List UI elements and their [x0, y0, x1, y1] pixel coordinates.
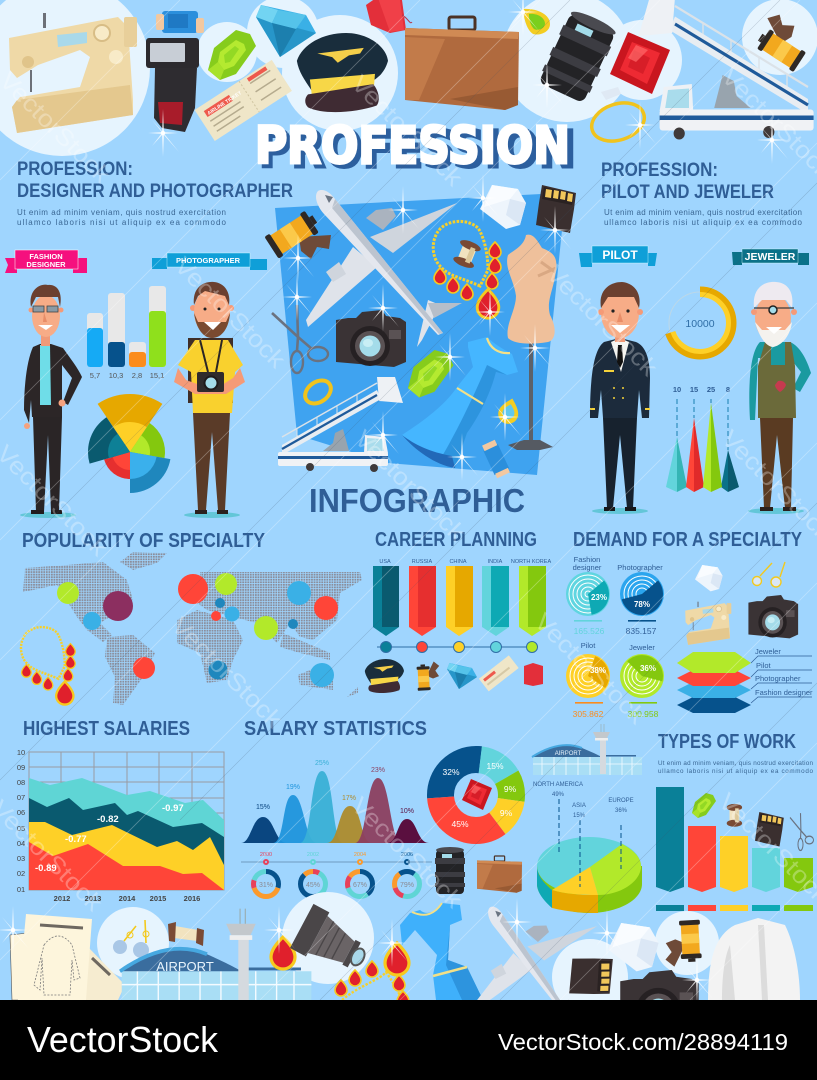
watermark: [0, 63, 817, 918]
icon: ruby pendant bottom: [271, 937, 295, 969]
demand gauge: fashion designer: Fashion: [574, 555, 600, 564]
footer bar: VectorStock.com/28894119: [498, 1029, 788, 1055]
ribbon: photographer: [152, 253, 267, 270]
donut chart with ruby: 9%: [500, 808, 513, 818]
title: PROFESSION: [259, 121, 576, 180]
donut chart with ruby: 45%: [451, 819, 469, 829]
career ribbons chart: CHINA: [449, 559, 467, 565]
icon: camera bottom: [620, 970, 699, 1034]
icon: suitcase small: [477, 856, 522, 893]
character: pilot: [590, 282, 650, 514]
timeline donuts: 2002: [307, 852, 319, 858]
icon: ruby necklace: [433, 221, 501, 318]
career icons row: [365, 655, 543, 696]
stacked area chart: 2012: [54, 894, 70, 903]
character: photographer: [174, 282, 245, 518]
watermark: VectorStock: [166, 612, 288, 735]
icon: blue thread spool: [156, 11, 204, 33]
ribbon: fashion designer: DESIGNER: [26, 260, 66, 269]
3D pie chart: 36%: [615, 808, 628, 814]
text block: types of work: Ut enim ad minim veniam, quis nostrud exercitation: [658, 760, 813, 767]
layered hexagon legend: [677, 647, 813, 713]
pyramid chart: 15: [690, 385, 698, 394]
heading: pilot and jeweler: [601, 160, 774, 203]
ribbon bar chart: types of work: [656, 787, 813, 911]
stacked area chart: -0.82: [97, 814, 119, 825]
demand gauge: pilot: 305.862: [573, 709, 604, 719]
airport small: [532, 724, 642, 775]
bell curves chart: 23%: [371, 767, 385, 774]
icon: scissors center: [272, 305, 328, 373]
text block: designer intro: [17, 208, 227, 227]
icon: camera flash: [146, 38, 199, 132]
3D pie chart: [533, 782, 642, 913]
icon: white shirt: [708, 918, 800, 1000]
career ribbons chart: INDIA: [488, 559, 503, 565]
demand gauge: photographer: 835.157: [626, 626, 657, 636]
icon: thread spool bottom: [168, 922, 204, 946]
stacked area chart: -0.89: [35, 863, 57, 874]
icon: film roll: [746, 9, 811, 82]
stacked area chart: 04: [17, 839, 25, 848]
stacked area chart: 2016: [184, 894, 200, 903]
heading: highest salaries: HIGHEST SALARIES: [23, 718, 190, 740]
stacked area chart: 01: [17, 885, 25, 894]
bell curves chart: 19%: [286, 784, 300, 791]
text block: types of work: [658, 760, 813, 775]
donut gauge: 10000: 10000: [685, 318, 715, 330]
icon: airplane stairs center: [278, 377, 403, 472]
timeline donuts: 2006: [401, 852, 413, 858]
character: fashion designer: [20, 285, 82, 518]
bar chart: four values: 2,8: [132, 371, 142, 380]
bell curves chart: 17%: [342, 795, 356, 802]
ribbon: jeweler: JEWELER: [745, 251, 796, 263]
ribbon: pilot: PILOT: [602, 248, 638, 262]
icon: thread spool center: [452, 238, 482, 270]
icon: sewing machine: [9, 13, 137, 133]
heading: designer and photographer: [17, 159, 293, 202]
icon: gold ring center: [301, 376, 335, 408]
career ribbons chart: [373, 559, 551, 652]
airport large: AIRPORT: [156, 959, 214, 974]
icon: green gem center: [408, 350, 454, 398]
icon: necklace bottom: [335, 943, 409, 1007]
donut gauge: 10000: [666, 290, 734, 356]
polar pie chart: [88, 394, 170, 493]
demand gauge: pilot: Pilot: [581, 641, 596, 650]
icon: gold ring: [587, 87, 649, 147]
watermark: VectorStock: [529, 608, 651, 731]
icon: film roll center: [264, 209, 331, 259]
title: PROFESSION: [255, 117, 570, 176]
pyramid chart: 10: [673, 385, 681, 394]
demand gauge: jeweler: 300.958: [628, 709, 659, 719]
ribbon: jeweler: [732, 249, 809, 265]
timeline donuts: 2000: [260, 852, 272, 858]
character: jeweler: [748, 282, 811, 514]
icon: dress bottom: [400, 903, 483, 1000]
stacked area chart: 08: [17, 778, 25, 787]
heading: designer and photographer: DESIGNER AND PHOTOGRAPHER: [17, 181, 293, 202]
icon: gold earrings: [113, 920, 149, 958]
heading: career planning: CAREER PLANNING: [375, 529, 537, 551]
world map with bubbles: [23, 552, 362, 705]
layered hexagon legend: Photographer: [755, 674, 801, 683]
3D pie chart: NORTH AMERICA: [533, 782, 583, 788]
layered hexagon legend: Jeweler: [755, 647, 781, 656]
demand gauge: photographer: Photographer: [617, 563, 663, 572]
demand gauge: photographer: [617, 563, 664, 636]
career ribbons chart: NORTH KOREA: [511, 559, 551, 565]
icon: green gem: [208, 30, 256, 80]
stacked area chart: 2013: [85, 894, 101, 903]
bar chart: four values: 10,3: [109, 371, 123, 380]
icon: suitcase: [405, 17, 519, 110]
text block: pilot intro: Ut enim ad minim veniam, quis nostrud exercitation: [604, 208, 802, 217]
demand gauge: photographer: 78%: [634, 600, 650, 609]
watermark: VectorStock: [346, 792, 468, 915]
donut chart with ruby: 15%: [486, 761, 504, 771]
stacked area chart: 09: [17, 763, 25, 772]
timeline donuts: 31%: [259, 882, 273, 889]
timeline donuts: 2004: [354, 852, 366, 858]
bar chart: four values: 5,7: [90, 371, 100, 380]
demand icons: [685, 562, 798, 645]
stacked area chart: 2015: [150, 894, 166, 903]
text block: pilot intro: [604, 208, 803, 227]
watermark: VectorStock: [349, 425, 471, 548]
pyramid chart: 8: [726, 385, 730, 394]
ribbon: photographer: PHOTOGRAPHER: [176, 256, 241, 265]
demand gauge: pilot: 38%: [590, 666, 606, 675]
bell curves chart: 15%: [256, 804, 270, 811]
watermark: VectorStock: [541, 260, 663, 383]
text block: types of work: ullamco laboris nisi ut aliquip ex ea commodo: [658, 768, 813, 775]
text block: designer intro: ullamco laboris nisi ut aliquip ex ea commodo: [17, 218, 227, 227]
heading: pilot and jeweler: PROFESSION:: [601, 160, 718, 181]
demand gauge: jeweler: 36%: [640, 664, 656, 673]
stacked area chart: -0.77: [65, 834, 87, 845]
icon: sewing patterns: [10, 914, 125, 1000]
bell curves chart: [241, 760, 429, 843]
bell curves chart: 25%: [315, 760, 329, 767]
demand gauge: jeweler: [620, 643, 664, 719]
icon: pilot cap: [297, 33, 388, 112]
icon: camera center: [336, 310, 406, 367]
icon: lens small: [435, 847, 465, 894]
icon: airplane stairs truck: [639, 0, 814, 140]
timeline donuts: 67%: [353, 882, 367, 889]
career ribbons chart: RUSSIA: [412, 559, 433, 565]
career ribbons chart: USA: [379, 559, 391, 565]
heading: pilot and jeweler: PILOT AND JEWELER: [601, 182, 774, 203]
icon: airplane: [306, 190, 462, 347]
heading: popularity of specialty: POPULARITY OF SPECIALTY: [22, 530, 266, 552]
icon: blue spool center: [481, 439, 511, 479]
airport small: AIRPORT: [555, 751, 582, 757]
icon: necklace left: [21, 627, 75, 705]
timeline donuts: [241, 852, 432, 896]
icon: green pendant: [523, 9, 550, 35]
icon: vintage camera: [290, 904, 375, 981]
demand gauge: fashion designer: 165.526: [574, 626, 605, 636]
icon: red thread spool: [366, 0, 412, 33]
stacked area chart: -0.97: [162, 803, 184, 814]
ribbon: fashion designer: [5, 250, 87, 273]
demand gauge: fashion designer: [566, 555, 610, 636]
stacked area chart: 10: [17, 748, 25, 757]
3D pie chart: 49%: [552, 792, 565, 798]
3D pie chart: ASIA: [572, 803, 586, 809]
icon: memory card bottom: [564, 953, 618, 999]
bar chart: four values: [87, 286, 166, 380]
donut chart with ruby: 9%: [504, 784, 517, 794]
demand gauge: fashion designer: 23%: [591, 593, 607, 602]
stacked area chart: [17, 748, 224, 903]
pyramid chart: [666, 385, 739, 492]
heading: designer and photographer: PROFESSION:: [17, 159, 133, 180]
icon: blue diamond: [256, 5, 316, 57]
stacked area chart: 02: [17, 869, 25, 878]
stacked area chart: 05: [17, 824, 25, 833]
types of work icons: [692, 793, 814, 850]
text block: designer intro: Ut enim ad minim veniam, quis nostrud exercitation: [17, 208, 226, 217]
pyramid chart: 25: [707, 385, 715, 394]
icon: tailor mannequin: [507, 235, 556, 450]
heading: salary statistics: SALARY STATISTICS: [244, 718, 427, 740]
footer bar: VectorStock: [27, 1019, 219, 1060]
demand gauge: jeweler: Jeweler: [629, 643, 655, 652]
ribbon: fashion designer: FASHION: [29, 252, 63, 261]
icon: film bottom: [658, 911, 719, 977]
icon: airline ticket: AIRLINE TICKET: [207, 90, 243, 117]
bar chart: four values: 15,1: [150, 371, 164, 380]
stacked area chart: 03: [17, 854, 25, 863]
icon: blue pendant: [496, 396, 522, 426]
stacked area chart: 06: [17, 808, 25, 817]
watermark: VectorStock: [346, 70, 468, 193]
icon: camera lens: [537, 7, 619, 104]
3D pie chart: 15%: [573, 813, 586, 819]
donut chart with ruby: [440, 760, 517, 830]
layered hexagon legend: Fashion designer: [755, 688, 813, 697]
footer bar: [0, 1000, 817, 1080]
stacked area chart: 07: [17, 793, 25, 802]
icon: airplane bottom: [470, 906, 602, 1038]
icon: airline ticket: [195, 60, 292, 141]
icon: red ruby: [610, 32, 670, 94]
donut chart with ruby: 32%: [442, 767, 460, 777]
ribbon: pilot: [579, 246, 657, 267]
3D pie chart: EUROPE: [608, 798, 634, 804]
center blue panel: [275, 193, 562, 475]
demand gauge: fashion designer: designer: [573, 563, 602, 572]
airport large: [120, 909, 311, 1006]
layered hexagon legend: Pilot: [756, 661, 772, 670]
text block: pilot intro: ullamco laboris nisi ut aliquip ex ea commodo: [604, 218, 803, 227]
icon: blue dress: [402, 337, 518, 468]
bottom circles: [97, 892, 719, 1015]
timeline donuts: 45%: [306, 882, 320, 889]
top item circles: [0, 0, 817, 156]
timeline donuts: 79%: [400, 882, 414, 889]
stacked area chart: 2014: [119, 894, 136, 903]
icon: white diamond bottom: [608, 923, 659, 971]
icon: memory card: [536, 185, 576, 233]
bell curves chart: 10%: [400, 808, 414, 815]
heading: infographic: INFOGRAPHIC: [309, 482, 525, 519]
icon: white diamond: [480, 185, 526, 229]
demand gauge: pilot: [566, 641, 610, 719]
watermark: VectorStock: [169, 252, 291, 375]
